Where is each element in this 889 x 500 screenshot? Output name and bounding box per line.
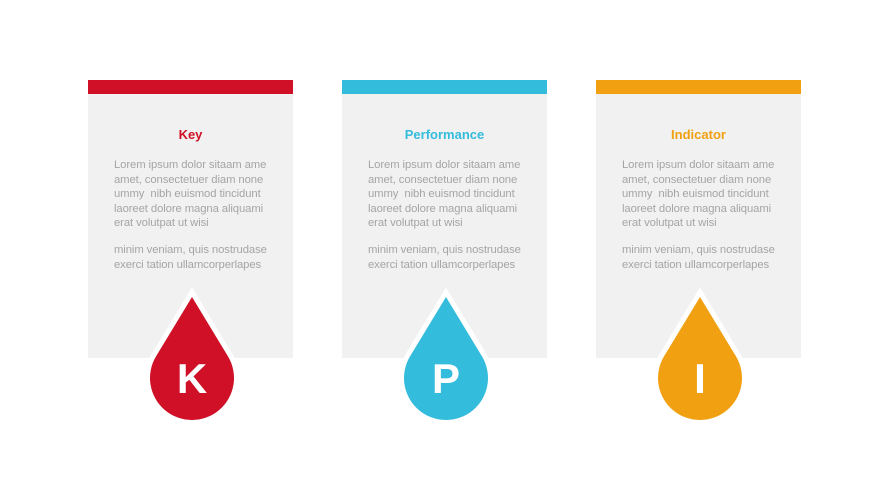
text block: indicator: Lorem ipsum dolor sitaam ame — [622, 159, 774, 171]
text block: indicator: erat volutpat ut wisi — [622, 217, 717, 229]
icon: drop I: I — [694, 355, 706, 402]
text block: key: amet, consectetuer diam none — [114, 174, 263, 186]
text block: indicator: ummy nibh euismod tincidunt — [622, 188, 769, 200]
heading: indicator: Indicator — [671, 127, 726, 142]
text block: performance: Lorem ipsum dolor sitaam ame — [368, 159, 520, 171]
text block: performance: minim veniam, quis nostrudase — [368, 244, 521, 256]
text block: indicator: exerci tation ullamcorperlapes — [622, 259, 769, 271]
text block: key: minim veniam, quis nostrudase — [114, 244, 267, 256]
icon: drop P: P — [432, 355, 460, 402]
text block: performance: laoreet dolore magna aliquami — [368, 203, 517, 215]
text block: performance: erat volutpat ut wisi — [368, 217, 463, 229]
heading: performance: Performance — [405, 127, 484, 142]
heading: key: Key — [179, 127, 202, 142]
text block: key: ummy nibh euismod tincidunt — [114, 188, 261, 200]
panel: indicator — [596, 80, 801, 358]
text block: performance: amet, consectetuer diam none — [368, 174, 517, 186]
text block: performance — [368, 159, 521, 271]
icon: drop K — [150, 297, 234, 420]
icon: drop K: K — [177, 355, 207, 402]
text block: key: exerci tation ullamcorperlapes — [114, 259, 261, 271]
text block: key — [114, 159, 267, 271]
text block: performance: ummy nibh euismod tincidunt — [368, 188, 515, 200]
icon: drop P — [404, 297, 488, 420]
text block: key: erat volutpat ut wisi — [114, 217, 209, 229]
panel: performance — [342, 80, 547, 358]
text block: indicator: minim veniam, quis nostrudase — [622, 244, 775, 256]
text block: indicator — [622, 159, 775, 271]
text block: indicator: laoreet dolore magna aliquami — [622, 203, 771, 215]
icon: drop I — [658, 297, 742, 420]
text block: key: laoreet dolore magna aliquami — [114, 203, 263, 215]
panel: key — [88, 80, 293, 358]
text block: key: Lorem ipsum dolor sitaam ame — [114, 159, 266, 171]
text block: indicator: amet, consectetuer diam none — [622, 174, 771, 186]
text block: performance: exerci tation ullamcorperlapes — [368, 259, 515, 271]
